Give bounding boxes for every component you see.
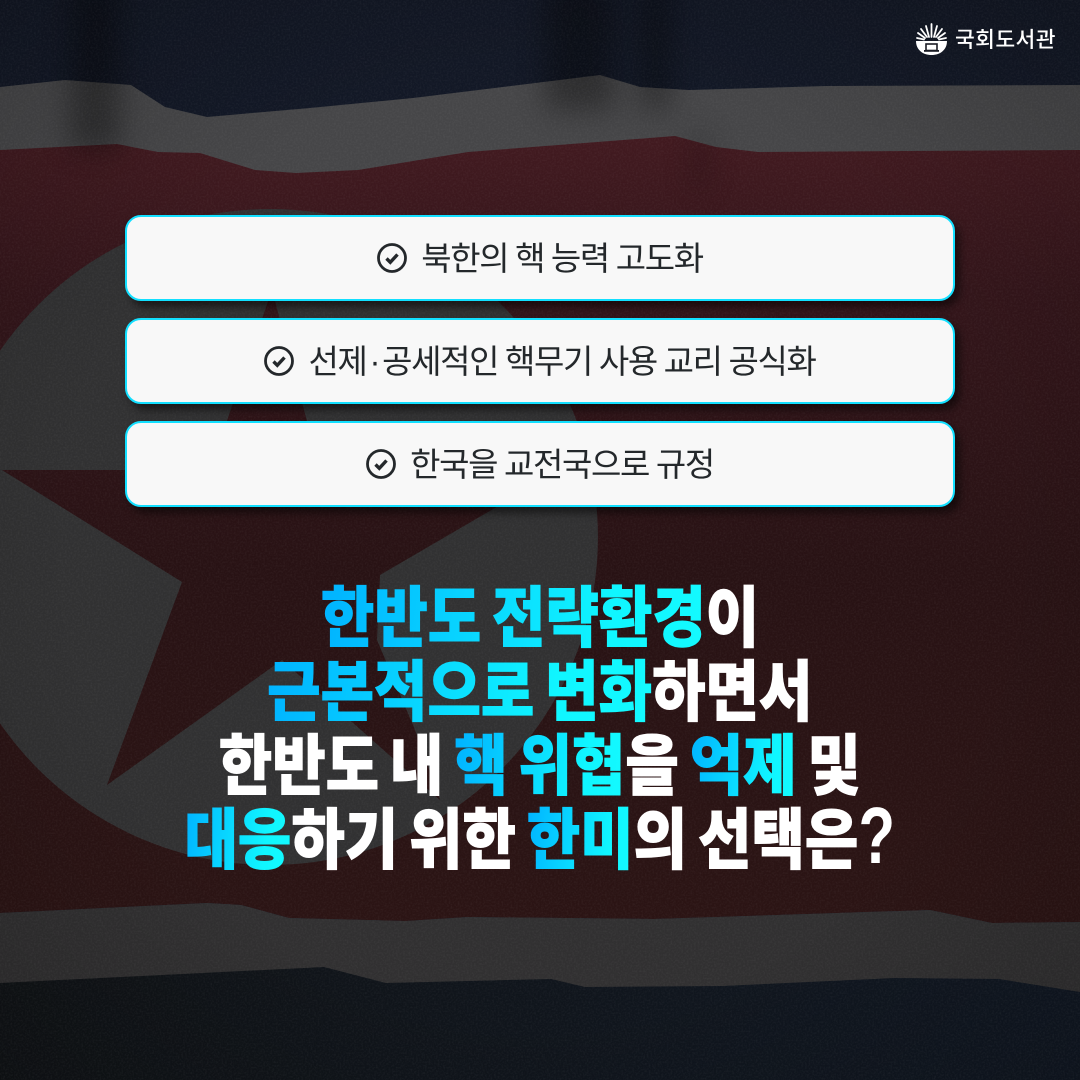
title: ? <box>858 791 895 880</box>
panel: item 1 <box>125 215 955 301</box>
circle emblem with star <box>0 209 598 865</box>
title: 한반도 전략환경이 <box>321 581 759 655</box>
icon: library emblem <box>916 23 947 55</box>
title: 한반도 내 핵 위협을 억제 및 <box>219 729 861 803</box>
bottom white stripe <box>0 903 1080 992</box>
top white stripe <box>0 75 1080 200</box>
red field <box>0 136 1080 923</box>
title: 대응하기 위한 한미의 선택은 <box>185 803 858 877</box>
panel: item 3 <box>125 421 955 507</box>
item text: 북한의 핵 능력 고도화 <box>421 240 703 276</box>
title: 근본적으로 변화하면서 <box>267 655 813 729</box>
item text: 한국을 교전국으로 규정 <box>410 446 714 482</box>
icon: check circle <box>366 449 396 479</box>
logo text: 국회도서관 <box>955 28 1056 52</box>
icon: check circle <box>377 243 407 273</box>
item text: 선제·공세적인 핵무기 사용 교리 공식화 <box>308 342 816 380</box>
icon: check circle <box>264 346 294 376</box>
logo: 국회도서관 <box>916 23 1056 55</box>
title <box>185 581 895 880</box>
panel: item 2 <box>125 318 955 404</box>
fabric folds <box>70 0 710 190</box>
